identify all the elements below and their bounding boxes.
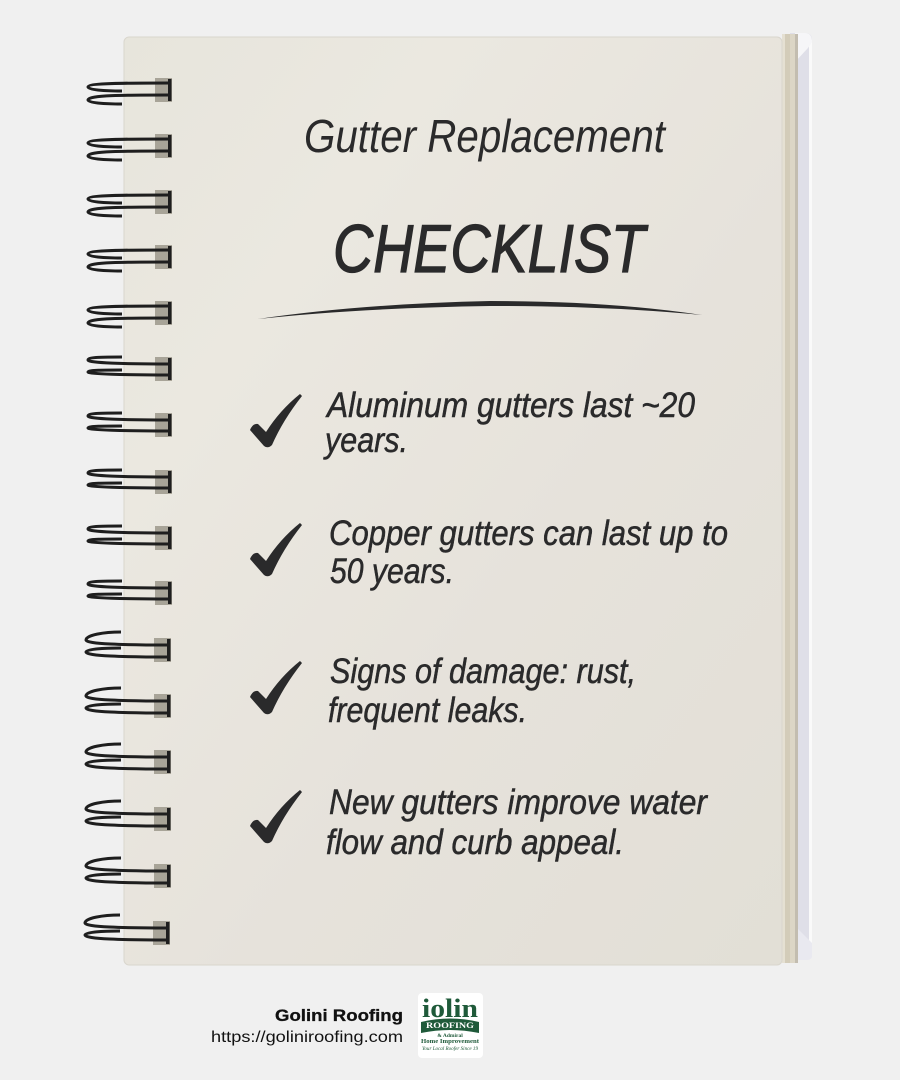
ring 6 bbox=[88, 357, 172, 381]
ring 12 bbox=[86, 688, 171, 718]
text: new gutters: New gutters improve water bbox=[329, 783, 708, 822]
text: aluminum gutters: Aluminum gutters last ~20 bbox=[325, 386, 695, 425]
text: new gutters bbox=[326, 783, 708, 862]
ring 3 bbox=[88, 190, 172, 216]
text: new gutters: flow and curb appeal. bbox=[326, 823, 624, 862]
logo: Golini Roofing: Home Improvement bbox=[421, 1039, 479, 1045]
icon: check mark 1 bbox=[250, 394, 302, 447]
checklist item 4 bbox=[250, 783, 708, 862]
ring 8 bbox=[88, 470, 172, 494]
ring 7 bbox=[88, 413, 172, 437]
ring 5 bbox=[88, 301, 172, 327]
notebook page edges bbox=[782, 34, 798, 963]
footer: company name and url: Golini Roofing bbox=[275, 1006, 403, 1025]
text: aluminum gutters: years. bbox=[323, 421, 408, 460]
notebook front page bbox=[124, 37, 782, 965]
logo: Golini Roofing: ROOFING bbox=[426, 1020, 474, 1030]
heading: CHECKLIST: CHECKLIST bbox=[333, 211, 649, 287]
ring 2 bbox=[88, 134, 172, 160]
text: signs of damage bbox=[328, 652, 636, 730]
ring 14 bbox=[86, 801, 171, 831]
text: copper gutters: 50 years. bbox=[330, 552, 454, 591]
checklist item 2 bbox=[250, 514, 728, 591]
ring 1 bbox=[88, 78, 172, 104]
spiral binding bbox=[85, 78, 172, 945]
text: signs of damage: Signs of damage: rust, bbox=[330, 652, 636, 691]
ring 9 bbox=[88, 526, 172, 550]
ring 10 bbox=[88, 581, 172, 605]
footer: company name and url bbox=[211, 1006, 403, 1046]
title: Gutter Replacement: Gutter Replacement bbox=[304, 110, 667, 162]
ring 11 bbox=[86, 632, 171, 662]
checklist item 1 bbox=[250, 386, 695, 460]
checklist item 3 bbox=[250, 652, 636, 730]
text: signs of damage: frequent leaks. bbox=[328, 691, 527, 730]
text: aluminum gutters bbox=[323, 386, 695, 460]
text: copper gutters bbox=[329, 514, 728, 591]
icon: check mark 4 bbox=[250, 790, 302, 843]
underline swoosh bbox=[258, 301, 702, 319]
ring 13 bbox=[86, 744, 171, 774]
ring 4 bbox=[88, 245, 172, 271]
notebook back cover bbox=[790, 33, 812, 960]
icon: check mark 2 bbox=[250, 523, 302, 576]
logo: Golini Roofing bbox=[418, 993, 483, 1058]
icon: check mark 3 bbox=[250, 661, 302, 714]
ring 16 bbox=[85, 915, 170, 945]
logo: Golini Roofing: iolin bbox=[422, 994, 479, 1023]
ring 15 bbox=[86, 858, 171, 888]
footer: company name and url: https://goliniroofing.com bbox=[211, 1029, 403, 1046]
logo: Golini Roofing: Your Local Roofer Since 19 bbox=[422, 1045, 478, 1052]
logo: Golini Roofing: & Admiral bbox=[437, 1033, 463, 1039]
text: copper gutters: Copper gutters can last up to bbox=[329, 514, 728, 553]
